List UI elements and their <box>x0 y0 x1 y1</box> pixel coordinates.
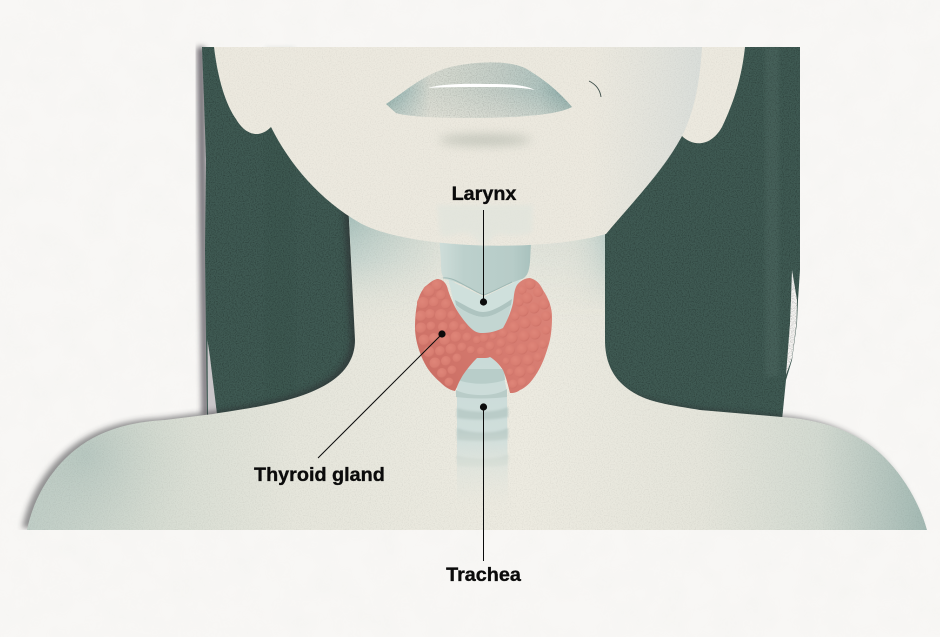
hair <box>197 47 800 420</box>
right strand gap <box>786 270 797 375</box>
label: thyroid gland: Thyroid gland <box>254 464 385 486</box>
lip highlight <box>428 84 535 90</box>
trachea <box>456 355 509 515</box>
chin shadow <box>439 134 531 146</box>
label: larynx <box>452 183 516 306</box>
label: trachea <box>446 403 522 586</box>
neck and shoulders <box>22 198 927 530</box>
label: thyroid gland <box>254 330 446 486</box>
crease mark <box>589 81 601 97</box>
thyroid gland <box>415 278 552 393</box>
larynx overlay showing through chin <box>437 205 533 247</box>
face <box>214 47 745 246</box>
larynx <box>437 205 533 340</box>
lips <box>386 62 572 118</box>
label: larynx: Larynx <box>452 183 516 205</box>
label: trachea: Trachea <box>446 564 522 586</box>
left strand gap <box>208 340 217 415</box>
